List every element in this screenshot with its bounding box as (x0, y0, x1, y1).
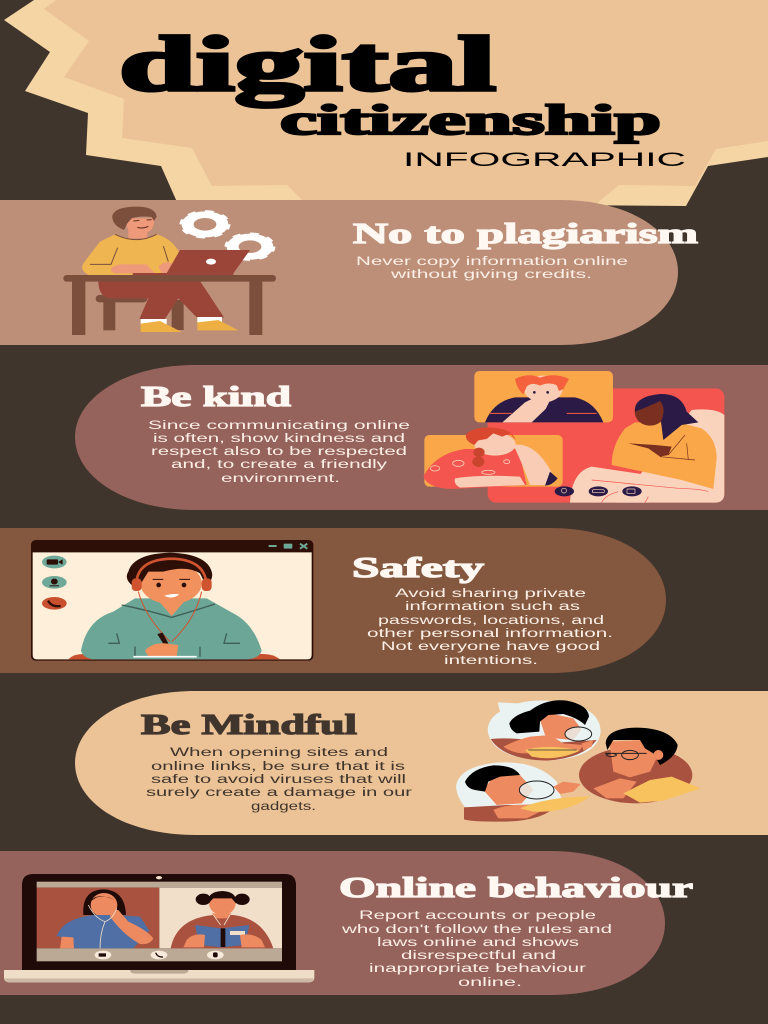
body text: online. (458, 977, 522, 989)
illustration: video call group (423, 371, 724, 503)
body text: laws online and shows (377, 937, 579, 949)
body text: respect also to be respected (151, 446, 407, 458)
illustration: people with magnifying glasses (456, 700, 701, 822)
body text: inappropriate behaviour (369, 963, 586, 975)
subtitle: INFOGRAPHIC (403, 149, 686, 171)
illustration: person at laptop with gears (63, 207, 276, 335)
title (119, 20, 686, 171)
panel: no to plagiarism (0, 200, 698, 345)
heading: Online behaviour (339, 873, 693, 904)
body text (367, 588, 613, 667)
body text: disrespectful and (401, 950, 556, 962)
panel: safety (0, 528, 666, 673)
body text: Not everyone have good (381, 641, 600, 653)
body text: without giving credits. (389, 269, 592, 281)
illustration: laptop video call (4, 874, 314, 982)
heading: Be Mindful (141, 710, 357, 741)
body text: Never copy information online (356, 256, 628, 268)
body text: Avoid sharing private (395, 588, 586, 600)
body text: information such as (405, 601, 580, 613)
body text: other personal information. (367, 628, 613, 640)
body text: When opening sites and (170, 747, 388, 759)
body text (146, 747, 412, 813)
body text: who don't follow the rules and (340, 924, 612, 936)
title line: digital: digital (119, 20, 496, 107)
panel: be kind (75, 365, 768, 510)
body text: environment. (221, 473, 340, 485)
body text: and, to create a friendly (171, 459, 387, 471)
body text: is often, show kindness and (153, 433, 405, 445)
panel: be mindful (75, 691, 768, 835)
body text: Report accounts or people (359, 910, 596, 922)
body text (356, 256, 628, 281)
body text: online links, be sure that it is (151, 761, 405, 773)
heading: No to plagiarism (353, 219, 698, 250)
body text: passwords, locations, and (378, 615, 604, 627)
body text: gadgets. (251, 801, 316, 813)
body text: intentions. (444, 655, 538, 667)
body text: surely create a damage in our (146, 787, 412, 799)
header starburst background (4, 0, 768, 206)
body text (148, 420, 410, 485)
heading: Safety (352, 553, 484, 584)
body text (340, 910, 612, 989)
body text: Since communicating online (148, 420, 410, 432)
title line: citizenship: citizenship (280, 98, 661, 144)
illustration: video call window (31, 540, 313, 661)
body text: safe to avoid viruses that will (151, 774, 406, 786)
panel: online behaviour (0, 851, 693, 995)
heading: Be kind (141, 382, 292, 413)
